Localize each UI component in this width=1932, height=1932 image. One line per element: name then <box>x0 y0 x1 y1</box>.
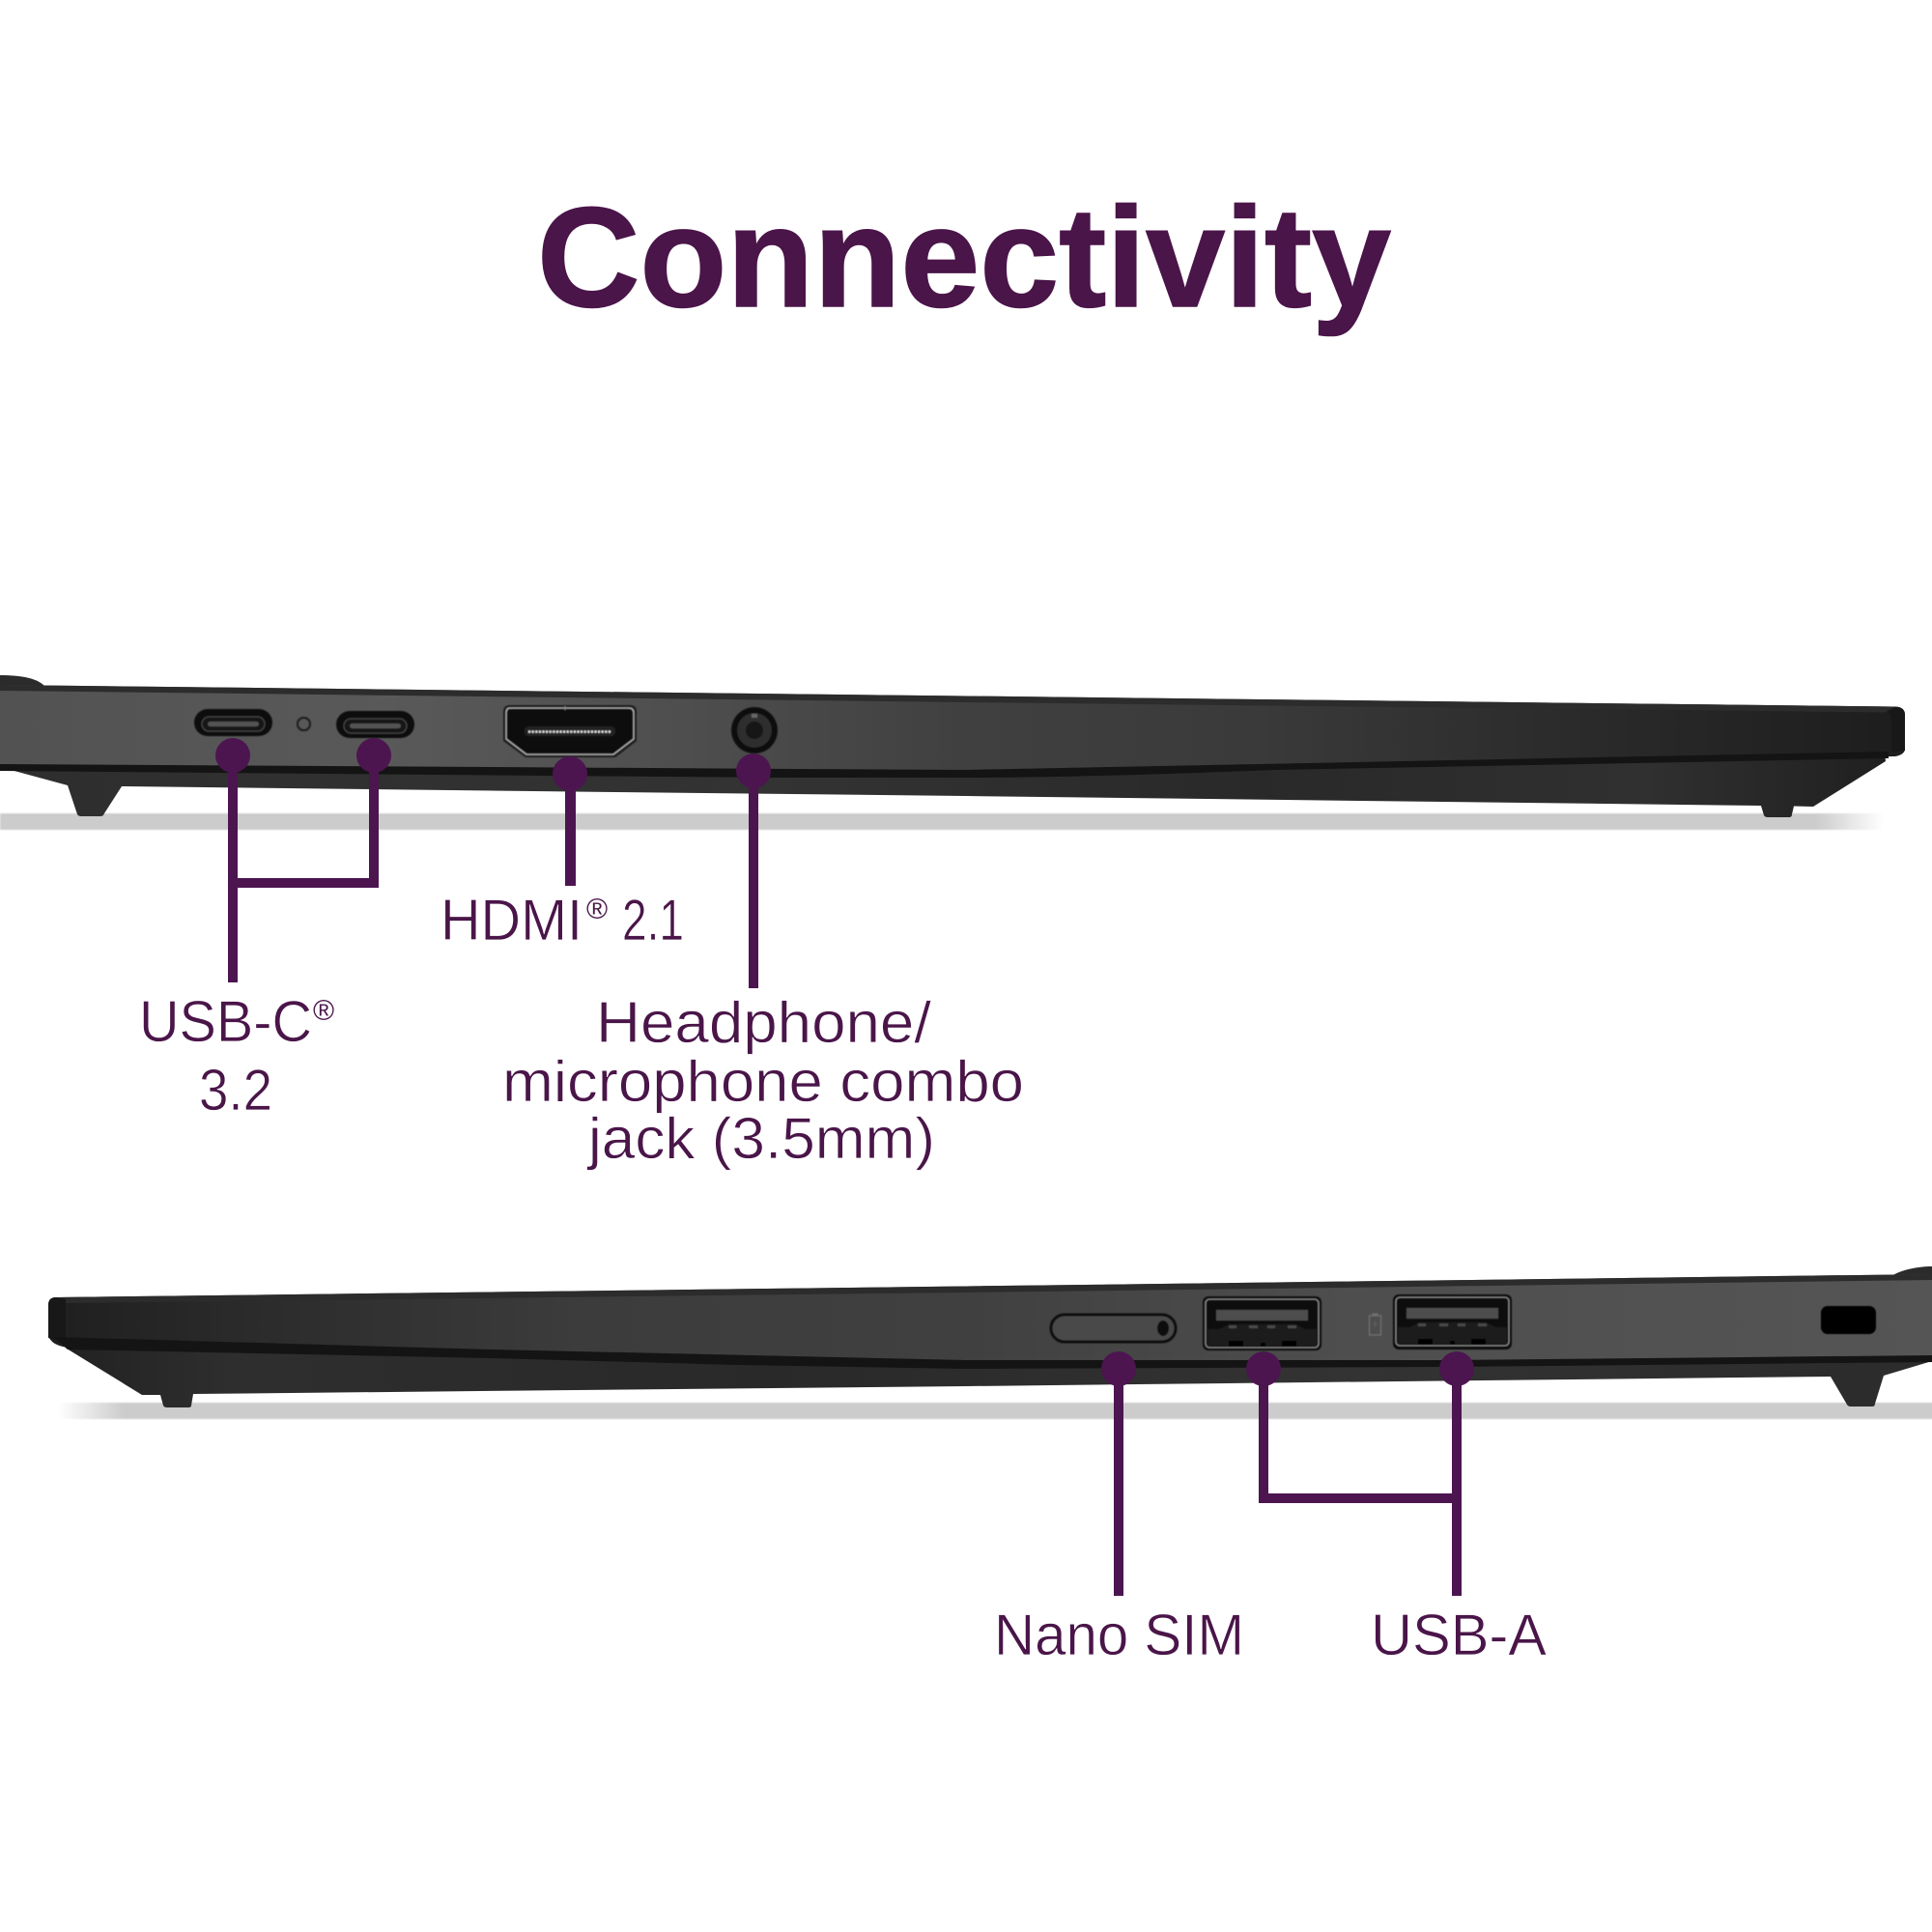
callout: HDMI: ® <box>586 894 608 925</box>
callout: USB-C: USB-C <box>139 989 312 1054</box>
callout: USB-C <box>139 738 391 1122</box>
lid side <box>48 1274 1932 1363</box>
base with feet <box>0 744 1886 817</box>
callout: HDMI: 2.1 <box>622 888 684 952</box>
callout: USB-C: ® <box>313 995 334 1027</box>
port: headphone jack <box>731 707 778 753</box>
status LED <box>298 718 310 730</box>
callout: headphone jack <box>502 753 1024 1171</box>
security lock slot <box>1821 1306 1876 1334</box>
callout: headphone jack: jack (3.5mm) <box>586 1106 935 1171</box>
charging battery icon <box>1370 1314 1381 1335</box>
callout: headphone jack: Headphone/ <box>596 990 931 1055</box>
callout: USB-A <box>1246 1351 1547 1667</box>
screen hinge bump <box>0 675 46 688</box>
port: HDMI <box>503 705 637 757</box>
title: Connectivity <box>537 179 1391 337</box>
port: USB-C 1 <box>194 709 272 736</box>
laptop: left side view <box>0 675 1905 830</box>
port: USB-A 1 <box>1203 1296 1321 1350</box>
callout: HDMI: HDMI <box>440 888 582 952</box>
port: USB-A 2 <box>1393 1294 1512 1350</box>
laptop: right side view <box>39 1266 1932 1419</box>
port: Nano SIM tray <box>1051 1315 1176 1342</box>
callout: HDMI <box>440 756 684 952</box>
callout: USB-C: 3.2 <box>199 1058 272 1122</box>
callout: headphone jack: microphone combo <box>502 1049 1024 1114</box>
lid side <box>0 685 1905 773</box>
ground shadow <box>0 813 1893 830</box>
screen hinge bump <box>1890 1266 1932 1280</box>
port: USB-C 2 <box>336 711 414 738</box>
ground shadow <box>39 1403 1932 1419</box>
callout: Nano SIM <box>994 1351 1244 1667</box>
base with feet <box>67 1338 1932 1407</box>
callout: USB-A: USB-A <box>1371 1603 1547 1667</box>
callout: Nano SIM: Nano SIM <box>994 1603 1244 1667</box>
